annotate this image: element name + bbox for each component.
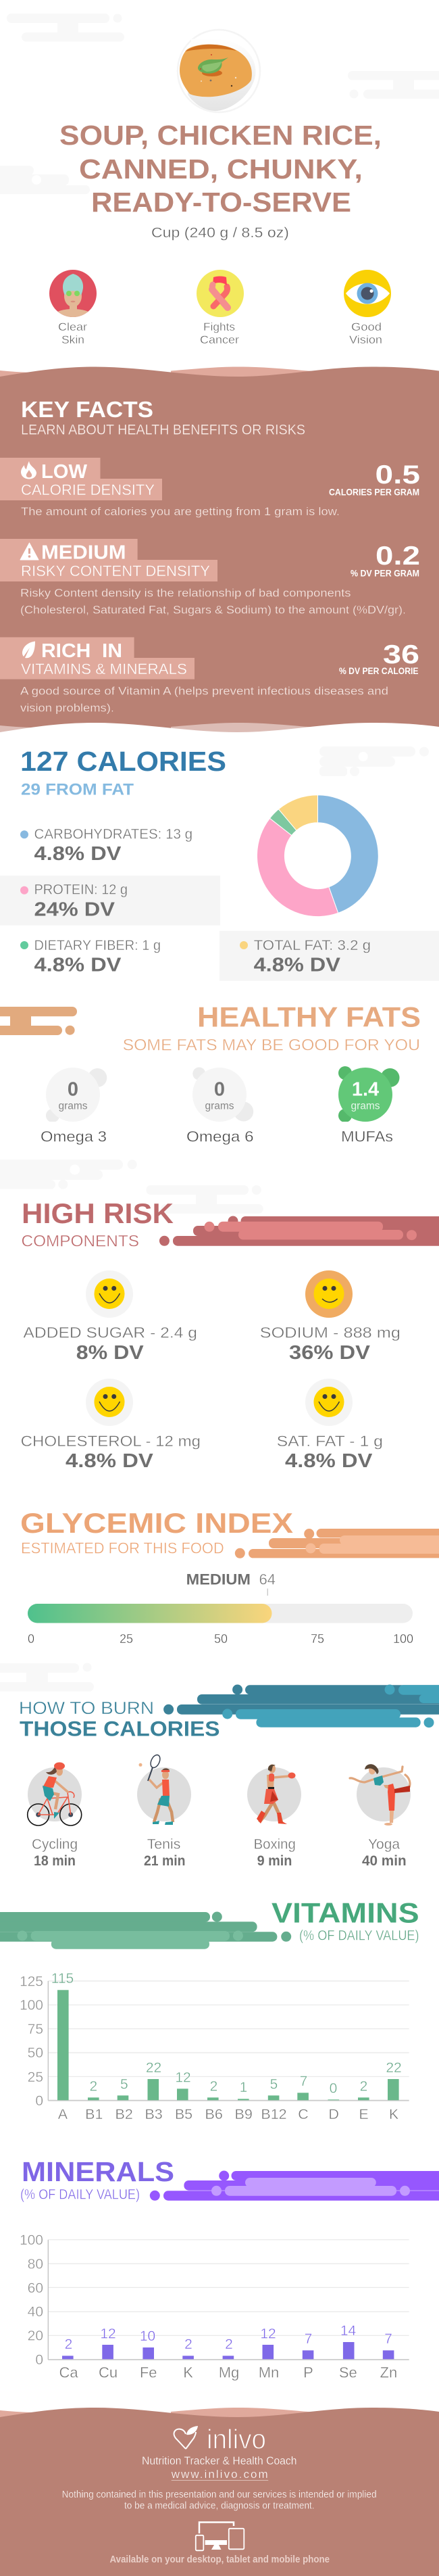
fact: rich in vitamins and minerals: VITAMINS & MINERALS [21, 661, 187, 677]
chart: minerals bar chart: 12 [260, 2326, 276, 2341]
risk: cholesterol: 4.8% DV [66, 1450, 154, 1472]
decoration: glycemic bars [235, 1529, 439, 1558]
subheading: vitamins: (% OF DAILY VALUE) [299, 1928, 419, 1943]
fact: rich in vitamins and minerals: 36 [383, 640, 419, 669]
fact: medium risky content density: MEDIUM [41, 542, 126, 564]
benefit: fights cancer [197, 270, 244, 346]
macro: total fat: 4.8% DV [254, 955, 341, 976]
macro: carbohydrates [20, 827, 192, 865]
chart: minerals bar chart: 2 [65, 2337, 72, 2352]
serving size: Cup (240 g / 8.5 oz) [151, 225, 289, 241]
chart: vitamins bar chart: 1 [240, 2080, 247, 2095]
heading: key facts: KEY FACTS [21, 397, 153, 422]
chart: vitamins bar chart: E [359, 2106, 369, 2122]
chart: vitamins bar chart: 125 [20, 1974, 43, 1989]
fact: low calorie density: 0.5 [376, 460, 420, 490]
icon: flame [21, 461, 36, 479]
activity: boxing: 9 min [257, 1853, 292, 1869]
chart: vitamins bar chart: 12 [175, 2070, 191, 2085]
activity: yoga: 40 min [362, 1853, 407, 1869]
chart: minerals bar chart: 2 [225, 2337, 233, 2352]
decoration: high risk bars [159, 1216, 439, 1246]
label: good vision: Good [351, 320, 382, 333]
decoration: burn bars [163, 1685, 439, 1727]
icon: leaf [22, 641, 35, 658]
subheading: minerals: (% OF DAILY VALUE) [20, 2187, 140, 2202]
macro: total fat: TOTAL FAT: 3.2 g [254, 938, 371, 953]
fact: medium risky content density: (Cholesterol, Saturated Fat, Sugars & Sodium) to the amount (%DV/gr). [20, 604, 406, 617]
label: good vision: Vision [349, 333, 382, 346]
fat: omega 6: Omega 6 [186, 1128, 254, 1145]
activity: tennis: 21 min [144, 1853, 185, 1869]
chart: minerals bar chart: 7 [384, 2331, 392, 2347]
chart: vitamins bar chart: B6 [205, 2106, 223, 2122]
website link: www.inlivo.com [171, 2468, 268, 2481]
heading: glycemic index: GLYCEMIC INDEX [20, 1507, 293, 1539]
fat: omega 3: grams [58, 1101, 88, 1112]
chart: vitamins bar chart: A [58, 2106, 68, 2122]
chart: vitamins bar chart: 100 [20, 1997, 43, 2013]
chart: vitamins bar chart: K [389, 2106, 399, 2122]
icon: devices [196, 2522, 244, 2550]
disclaimer: Nothing contained in this presentation and our services is intended or implied [62, 2489, 377, 2500]
risk: sodium [260, 1270, 401, 1364]
chart: minerals bar chart: Fe [140, 2364, 157, 2381]
activity: yoga: Yoga [368, 1836, 400, 1852]
chart: vitamins bar chart: 50 [28, 2045, 43, 2061]
logo: inlivo: inlivo [207, 2424, 266, 2455]
chart: vitamins bar chart: 75 [28, 2022, 43, 2037]
risk: saturated fat [277, 1379, 383, 1472]
fat: omega 3: 0 [68, 1079, 78, 1101]
fact: rich in vitamins and minerals: A good source of Vitamin A (helps prevent infectious diseases and [20, 686, 388, 698]
fat: mufas: MUFAs [341, 1128, 393, 1145]
macro: dietary fiber: 4.8% DV [34, 955, 122, 976]
fat: omega 3: Omega 3 [41, 1128, 107, 1145]
chart: vitamins bar chart: B5 [175, 2106, 192, 2122]
chart: glycemic index gauge: 0 [28, 1632, 34, 1646]
activity: tennis [137, 1753, 191, 1869]
disclaimer [62, 2489, 377, 2512]
heading: minerals: MINERALS [22, 2156, 174, 2187]
chart: vitamins bar chart: 25 [28, 2070, 43, 2085]
title: SOUP, CHICKEN RICE, [59, 120, 382, 151]
chart: vitamins bar chart: 0 [35, 2093, 43, 2109]
fact: low calorie density [0, 458, 420, 518]
chart: vitamins bar chart: B3 [145, 2106, 163, 2122]
chart: vitamins bar chart: 5 [120, 2076, 128, 2092]
decoration: healthy fats bars [0, 1007, 77, 1035]
label: clear skin [58, 320, 87, 346]
label: clear skin: Skin [61, 333, 84, 346]
fat: mufas: 1.4 [352, 1079, 379, 1101]
heading: calories: 127 CALORIES [20, 746, 226, 777]
subheading: glycemic index: ESTIMATED FOR THIS FOOD [21, 1540, 224, 1557]
chart: minerals bar chart: Cu [99, 2364, 118, 2381]
chart: glycemic index gauge: 25 [120, 1632, 133, 1646]
subheading: key facts: LEARN ABOUT HEALTH BENEFITS OR RISKS [21, 422, 305, 438]
fact: medium risky content density [0, 539, 420, 617]
chart: minerals bar chart: 20 [28, 2329, 43, 2344]
chart: minerals bar chart: Zn [380, 2364, 397, 2381]
icon: warning triangle [20, 543, 38, 560]
fact: low calorie density: LOW [41, 461, 88, 483]
fact: low calorie density: CALORIE DENSITY [21, 481, 155, 498]
fat: omega 6: 0 [214, 1079, 225, 1101]
chart: minerals bar chart: 12 [100, 2326, 116, 2341]
chart: minerals bar chart: 10 [140, 2329, 155, 2344]
macro: dietary fiber: DIETARY FIBER: 1 g [34, 938, 161, 953]
heading: healthy fats: HEALTHY FATS [197, 1001, 421, 1032]
macro: protein [0, 876, 220, 926]
chart: vitamins bar chart: D [328, 2106, 339, 2122]
chart: glycemic index gauge [28, 1571, 413, 1646]
chart: vitamins bar chart [20, 1971, 409, 2122]
fat: omega 6: grams [205, 1101, 234, 1112]
fact: medium risky content density: % DV PER GRAM [351, 568, 419, 579]
label: clear skin: Clear [58, 320, 87, 333]
risk: added sugar: 8% DV [76, 1342, 144, 1364]
background clouds [0, 14, 439, 1692]
disclaimer: to be a medical advice, diagnosis or treatment. [124, 2501, 315, 2512]
fat: mufas: grams [351, 1101, 380, 1112]
chart: minerals bar chart [20, 2233, 409, 2381]
chart: minerals bar chart: Mn [259, 2364, 279, 2381]
fact: low calorie density: CALORIES PER GRAM [329, 487, 419, 498]
activity: boxing: Boxing [254, 1836, 296, 1852]
heading: high risk: HIGH RISK [22, 1197, 174, 1229]
chart: vitamins bar chart: 2 [89, 2078, 97, 2094]
fact: rich in vitamins and minerals [0, 637, 419, 714]
label: fights cancer: Cancer [200, 333, 239, 346]
macro: carbohydrates: CARBOHYDRATES: 13 g [34, 827, 192, 842]
chart: glycemic index gauge: MEDIUM [186, 1571, 251, 1588]
logo: inlivo [174, 2424, 266, 2455]
chart: vitamins bar chart: C [298, 2106, 309, 2122]
macro: dietary fiber [20, 938, 161, 976]
chart: vitamins bar chart: 115 [51, 1971, 74, 1986]
fact: rich in vitamins and minerals: vision problems). [20, 702, 114, 714]
chart: vitamins bar chart: B9 [235, 2106, 253, 2122]
risk: cholesterol [21, 1379, 201, 1472]
decoration: vitamins bars [0, 1912, 291, 1949]
chart: minerals bar chart: 80 [28, 2257, 43, 2272]
chart: minerals bar chart: Ca [59, 2364, 78, 2381]
fact: medium risky content density: 0.2 [376, 542, 420, 571]
activity: boxing [247, 1765, 301, 1869]
chart: minerals bar chart: 100 [20, 2233, 43, 2248]
panel: key facts [0, 366, 439, 742]
risk: added sugar [23, 1270, 197, 1364]
chart: minerals bar chart: 14 [340, 2323, 356, 2339]
chart: vitamins bar chart: 2 [210, 2078, 217, 2094]
macro: protein: 24% DV [34, 899, 115, 920]
chart: vitamins bar chart: 2 [360, 2078, 367, 2094]
fact: low calorie density: The amount of calories you are getting from 1 gram is low. [21, 506, 340, 518]
chart: vitamins bar chart: 7 [300, 2074, 307, 2089]
risk: saturated fat: SAT. FAT - 1 g [277, 1433, 383, 1450]
risk: sodium: 36% DV [289, 1342, 371, 1364]
chart: vitamins bar chart: 22 [386, 2060, 402, 2076]
availability note: Available on your desktop, tablet and mobile phone [109, 2554, 330, 2565]
risk: saturated fat: 4.8% DV [285, 1450, 373, 1472]
risk: sodium: SODIUM - 888 mg [260, 1325, 401, 1341]
title [59, 120, 382, 218]
fact: medium risky content density: RISKY CONTENT DENSITY [21, 563, 210, 579]
heading: how to burn: HOW TO BURN [19, 1699, 154, 1718]
fact: rich in vitamins and minerals: RICH IN [41, 640, 122, 662]
chart: vitamins bar chart: 5 [270, 2076, 278, 2092]
subheading: calories from fat: 29 FROM FAT [21, 781, 134, 799]
chart: minerals bar chart: 60 [28, 2281, 43, 2296]
chart: macronutrient donut [257, 795, 378, 917]
activity: yoga [350, 1764, 411, 1869]
activity: cycling: 18 min [34, 1853, 76, 1869]
title: CANNED, CHUNKY, [79, 153, 363, 185]
fat: omega 3 [41, 1068, 107, 1145]
activity: cycling [28, 1762, 82, 1869]
chart: minerals bar chart: 0 [35, 2352, 43, 2368]
heading: vitamins: VITAMINS [272, 1897, 419, 1928]
fat: mufas [338, 1066, 400, 1145]
chart: minerals bar chart: P [303, 2364, 313, 2381]
subheading: components: COMPONENTS [22, 1232, 139, 1250]
chart: minerals bar chart: 7 [305, 2331, 312, 2347]
fat: omega 6 [186, 1067, 254, 1145]
macro: protein: PROTEIN: 12 g [34, 882, 128, 898]
activity: tennis: Tenis [147, 1836, 180, 1852]
label: fights cancer: Fights [203, 320, 235, 333]
chart: glycemic index gauge: 100 [393, 1632, 413, 1646]
risk: cholesterol: CHOLESTEROL - 12 mg [21, 1433, 201, 1450]
icon: soup bowl [178, 30, 260, 112]
chart: glycemic index gauge: 50 [214, 1632, 228, 1646]
fact: rich in vitamins and minerals: % DV PER CALORIE [339, 666, 419, 676]
activity: cycling: Cycling [32, 1836, 78, 1852]
subheading: healthy fats: SOME FATS MAY BE GOOD FOR YOU [123, 1036, 420, 1054]
benefit: clear skin [49, 270, 97, 346]
heading: those calories: THOSE CALORIES [20, 1717, 220, 1741]
fact: medium risky content density: Risky Content density is the relationship of bad components [20, 587, 351, 599]
chart: minerals bar chart: 2 [184, 2337, 192, 2352]
chart: vitamins bar chart: 0 [330, 2081, 337, 2097]
macro: total fat [220, 931, 439, 981]
title: READY-TO-SERVE [91, 187, 351, 218]
chart: minerals bar chart: K [183, 2364, 193, 2381]
risk: added sugar: ADDED SUGAR - 2.4 g [23, 1325, 197, 1341]
tagline: Nutrition Tracker & Health Coach [142, 2454, 297, 2467]
benefit: good vision [344, 270, 391, 346]
panel: footer [0, 2408, 439, 2576]
chart: vitamins bar chart: 22 [146, 2060, 161, 2076]
chart: minerals bar chart: 40 [28, 2304, 43, 2320]
chart: minerals bar chart: Se [339, 2364, 357, 2381]
chart: glycemic index gauge: 64 [259, 1571, 276, 1588]
chart: vitamins bar chart: B2 [115, 2106, 133, 2122]
label: fights cancer [200, 320, 239, 346]
chart: glycemic index gauge: 75 [311, 1632, 324, 1646]
decoration: minerals bars [150, 2170, 439, 2201]
chart: vitamins bar chart: B1 [85, 2106, 103, 2122]
label: good vision [349, 320, 382, 346]
chart: minerals bar chart: Mg [219, 2364, 239, 2381]
macro: carbohydrates: 4.8% DV [34, 843, 122, 865]
chart: vitamins bar chart: B12 [261, 2106, 287, 2122]
